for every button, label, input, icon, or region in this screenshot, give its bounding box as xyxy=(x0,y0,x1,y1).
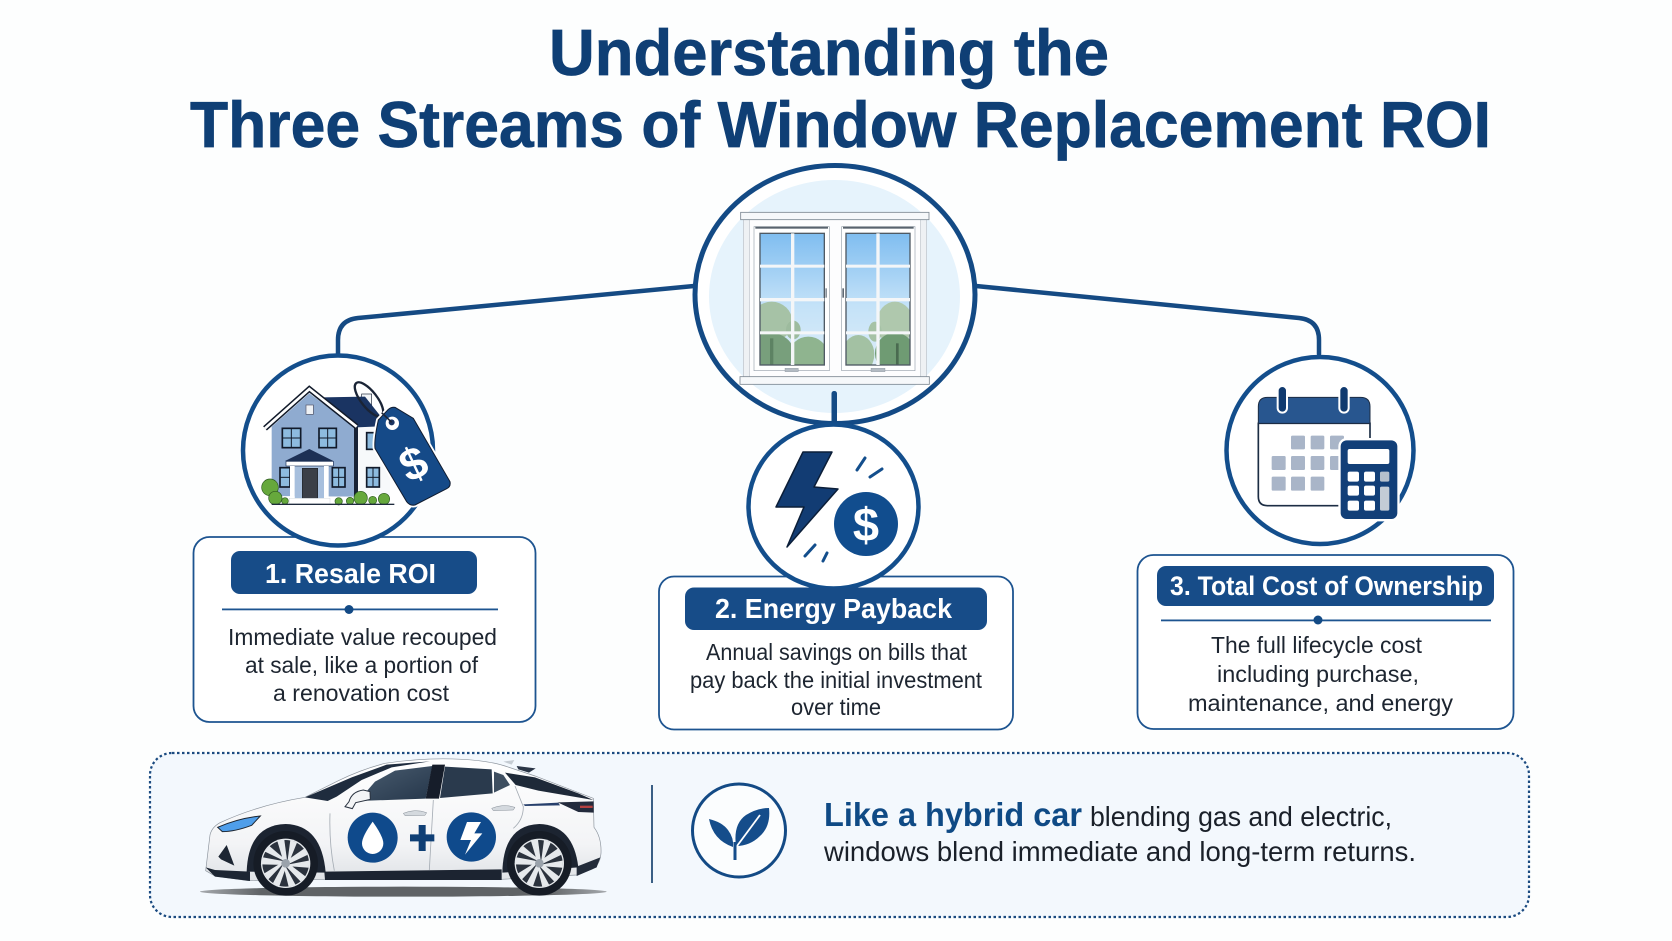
connector lines xyxy=(338,286,1319,354)
panel: hybrid car analogy xyxy=(150,753,1529,917)
text: resale ROI description: a renovation cost xyxy=(273,680,450,706)
icon: hybrid car xyxy=(200,759,607,897)
icon: lightning bolt and dollar: $ xyxy=(853,498,879,551)
text: hybrid car analogy: windows blend immediate and long-term returns. xyxy=(823,836,1416,867)
title: Understanding the xyxy=(549,16,1109,89)
icon: electric bolt badge xyxy=(447,812,496,862)
text: resale ROI description: at sale, like a portion of xyxy=(245,652,479,678)
panel: resale ROI xyxy=(194,356,536,722)
heading: energy payback: 2. Energy Payback xyxy=(715,593,952,624)
icon: house with price tag: $ xyxy=(391,435,436,492)
text: hybrid car analogy: Like a hybrid car xyxy=(824,796,1082,833)
text: energy payback description: over time xyxy=(791,694,881,720)
connector: window to energy payback xyxy=(832,391,837,425)
text: energy payback description: pay back the initial investment xyxy=(690,667,983,693)
heading: resale ROI: 1. Resale ROI xyxy=(265,558,436,589)
heading: resale ROI xyxy=(231,551,477,594)
text: hybrid car analogy: blending gas and electric, xyxy=(1090,801,1392,832)
icon: leaf badge xyxy=(692,784,786,877)
heading: total cost of ownership xyxy=(1157,566,1494,606)
text: resale ROI description: Immediate value recouped xyxy=(228,624,497,650)
heading: total cost of ownership: 3. Total Cost of Ownership xyxy=(1170,571,1483,601)
panel: energy payback xyxy=(659,424,1013,730)
text: total cost description: The full lifecycle cost xyxy=(1211,632,1423,658)
text: energy payback description xyxy=(690,639,983,720)
text: total cost description: including purchase, xyxy=(1217,661,1419,687)
icon: fuel drop badge xyxy=(348,813,398,863)
text: energy payback description: Annual savings on bills that xyxy=(706,639,968,665)
text: total cost description: maintenance, and energy xyxy=(1188,690,1454,716)
title: Three Streams of Window Replacement ROI xyxy=(190,88,1491,161)
icon: lightning bolt and dollar xyxy=(776,452,898,561)
wheels xyxy=(247,824,578,896)
icon: window xyxy=(740,212,929,384)
icon: plus sign xyxy=(410,825,434,851)
icon: calendar and calculator xyxy=(1258,386,1397,519)
panel: total cost of ownership xyxy=(1138,357,1514,729)
infographic xyxy=(148,28,1530,918)
panel: central window xyxy=(695,166,975,424)
title xyxy=(190,16,1491,161)
heading: energy payback xyxy=(685,588,987,630)
icon: house with price tag xyxy=(262,378,450,505)
text: resale ROI description xyxy=(228,624,497,706)
text: hybrid car analogy xyxy=(823,796,1416,867)
text: total cost description xyxy=(1188,632,1454,716)
